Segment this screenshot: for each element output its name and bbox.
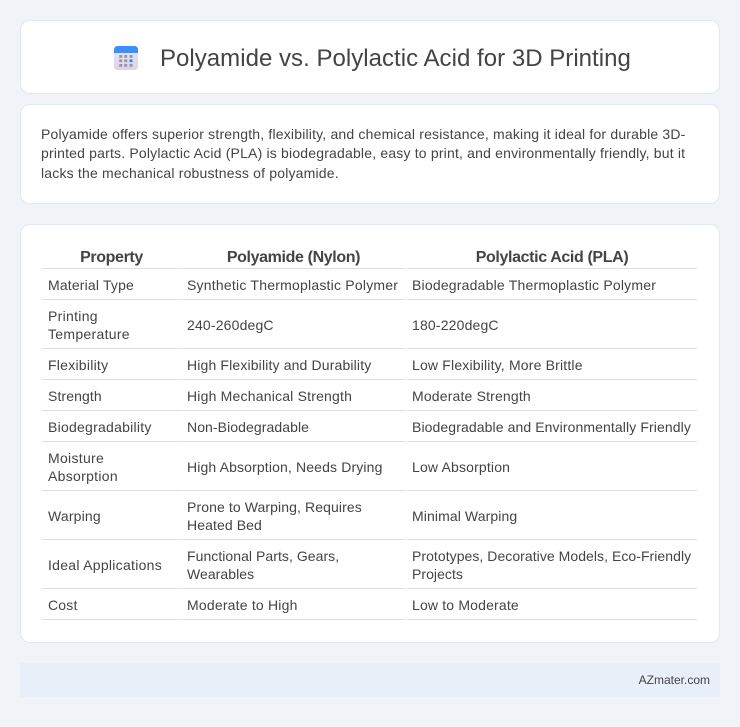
comparison table: High Absorption, Needs Drying bbox=[187, 459, 382, 475]
summary text: lacks the mechanical robustness of polyamide. bbox=[41, 165, 339, 181]
comparison table: Property bbox=[80, 249, 143, 266]
footer bar bbox=[20, 663, 720, 697]
comparison table: Wearables bbox=[187, 566, 254, 582]
heading: Polyamide vs. Polylactic Acid for 3D Printing bbox=[160, 45, 631, 72]
comparison table: Polyamide (Nylon) bbox=[227, 249, 360, 266]
comparison table: Low Absorption bbox=[412, 459, 510, 475]
comparison table: Biodegradable and Environmentally Friendly bbox=[412, 419, 691, 435]
summary text: Polyamide offers superior strength, flexibility, and chemical resistance, making it ideal for durable 3D- bbox=[41, 126, 686, 142]
summary card bbox=[20, 104, 720, 204]
comparison table: Minimal Warping bbox=[412, 508, 517, 524]
comparison table: 240-260degC bbox=[187, 317, 274, 333]
table card bbox=[20, 224, 720, 643]
row: warping bbox=[48, 499, 517, 533]
row: flexibility bbox=[48, 357, 583, 373]
comparison table: High Mechanical Strength bbox=[187, 388, 352, 404]
comparison table: Temperature bbox=[48, 326, 130, 342]
comparison table: Biodegradable Thermoplastic Polymer bbox=[412, 277, 656, 293]
comparison table: Synthetic Thermoplastic Polymer bbox=[187, 277, 398, 293]
row: strength bbox=[48, 388, 531, 404]
comparison table: High Flexibility and Durability bbox=[187, 357, 371, 373]
row: ideal applications bbox=[48, 548, 692, 582]
comparison table: Moderate Strength bbox=[412, 388, 531, 404]
comparison table: Flexibility bbox=[48, 357, 108, 373]
comparison table: Non-Biodegradable bbox=[187, 419, 309, 435]
column headers bbox=[80, 249, 628, 266]
comparison table: 180-220degC bbox=[412, 317, 499, 333]
icon: calendar bbox=[114, 46, 138, 70]
comparison table: Absorption bbox=[48, 468, 118, 484]
row: printing temperature bbox=[48, 308, 499, 342]
summary text bbox=[41, 126, 686, 181]
title card bbox=[20, 20, 720, 94]
comparison table: Material Type bbox=[48, 277, 134, 293]
comparison table: Heated Bed bbox=[187, 517, 262, 533]
comparison table: Polylactic Acid (PLA) bbox=[476, 249, 628, 266]
comparison table: Moisture bbox=[48, 450, 104, 466]
row: biodegradability bbox=[48, 419, 691, 435]
comparison table: Moderate to High bbox=[187, 597, 298, 613]
row: material type bbox=[48, 277, 656, 293]
comparison table: Functional Parts, Gears, bbox=[187, 548, 339, 564]
comparison table: Prone to Warping, Requires bbox=[187, 499, 362, 515]
row: cost bbox=[48, 597, 519, 613]
comparison table: Prototypes, Decorative Models, Eco-Friendly bbox=[412, 548, 691, 564]
comparison table: Biodegradability bbox=[48, 419, 152, 435]
comparison table: Low to Moderate bbox=[412, 597, 519, 613]
comparison table: Ideal Applications bbox=[48, 557, 162, 573]
comparison table: Projects bbox=[412, 566, 463, 582]
comparison table: Cost bbox=[48, 597, 78, 613]
summary text: printed parts. Polylactic Acid (PLA) is biodegradable, easy to print, and environmentally friendly, but it bbox=[41, 145, 685, 161]
footer brand: AZmater.com bbox=[639, 673, 710, 687]
row: moisture absorption bbox=[48, 450, 510, 484]
comparison table: Printing bbox=[48, 308, 98, 324]
comparison table: Strength bbox=[48, 388, 102, 404]
comparison table: Warping bbox=[48, 508, 101, 524]
comparison table: Low Flexibility, More Brittle bbox=[412, 357, 583, 373]
